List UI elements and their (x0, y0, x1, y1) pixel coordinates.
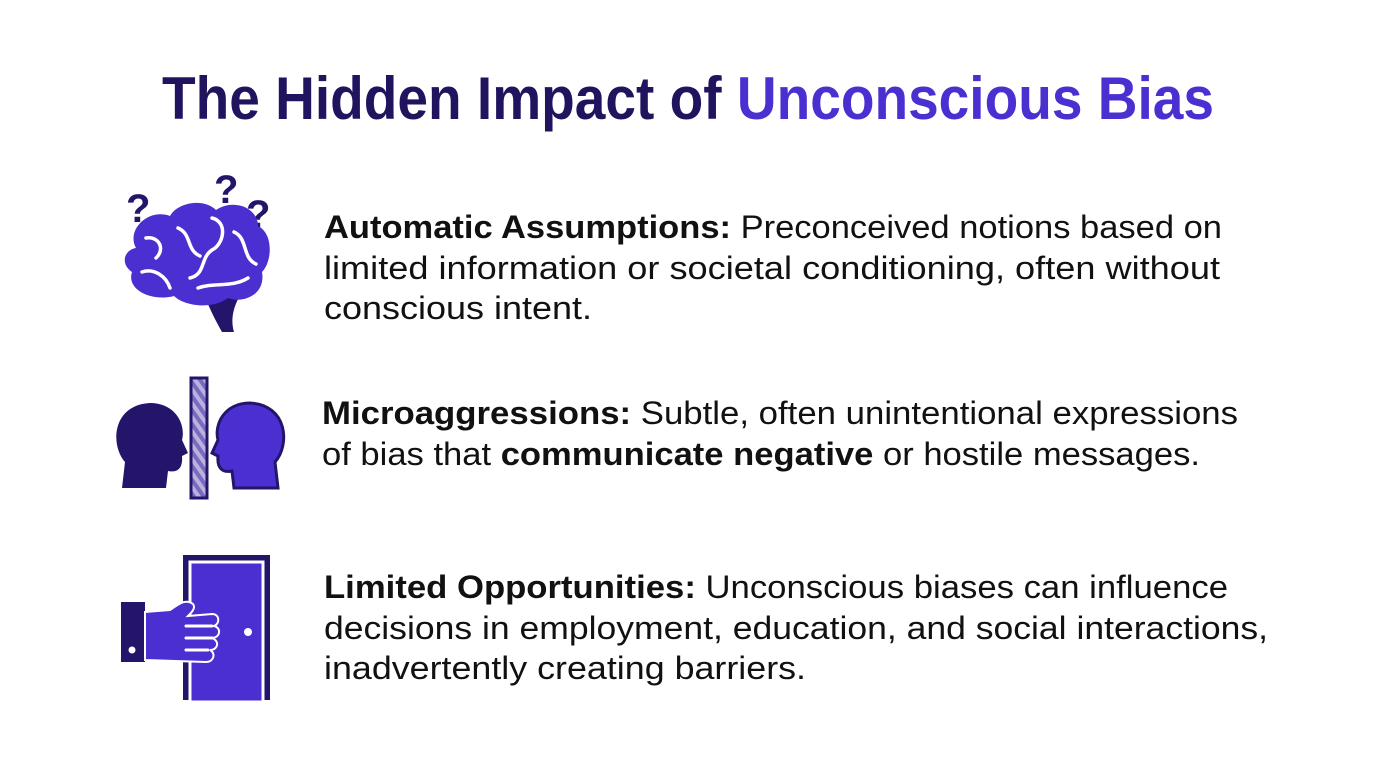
title: The Hidden Impact of Unconscious Bias (162, 65, 1214, 132)
icon: hand and door (121, 555, 270, 702)
text: limited opportunities: decisions in employment, education, and social interactions, (324, 610, 1268, 646)
text: automatic assumptions: conscious intent. (324, 290, 592, 326)
text: limited opportunities: Limited Opportunities: Unconscious biases can influence (324, 569, 1228, 605)
icon: brain with question marks (125, 168, 270, 332)
text: limited opportunities: inadvertently creating barriers. (324, 650, 806, 686)
icon: two heads with barrier (116, 378, 284, 498)
text: limited opportunities (324, 569, 1268, 686)
text: microaggressions (322, 395, 1238, 472)
text: microaggressions: of bias that communicate negative or hostile messages. (322, 436, 1200, 472)
icon: brain with question marks: ? (126, 187, 150, 231)
text: microaggressions: Microaggressions: Subtle, often unintentional expressions (322, 395, 1238, 431)
text: automatic assumptions (324, 209, 1222, 326)
icon: brain with question marks: ? (246, 193, 270, 237)
icon: brain with question marks: ? (214, 168, 238, 212)
text: automatic assumptions: limited information or societal conditioning, often without (324, 250, 1220, 286)
text: automatic assumptions: Automatic Assumptions: Preconceived notions based on (324, 209, 1222, 245)
